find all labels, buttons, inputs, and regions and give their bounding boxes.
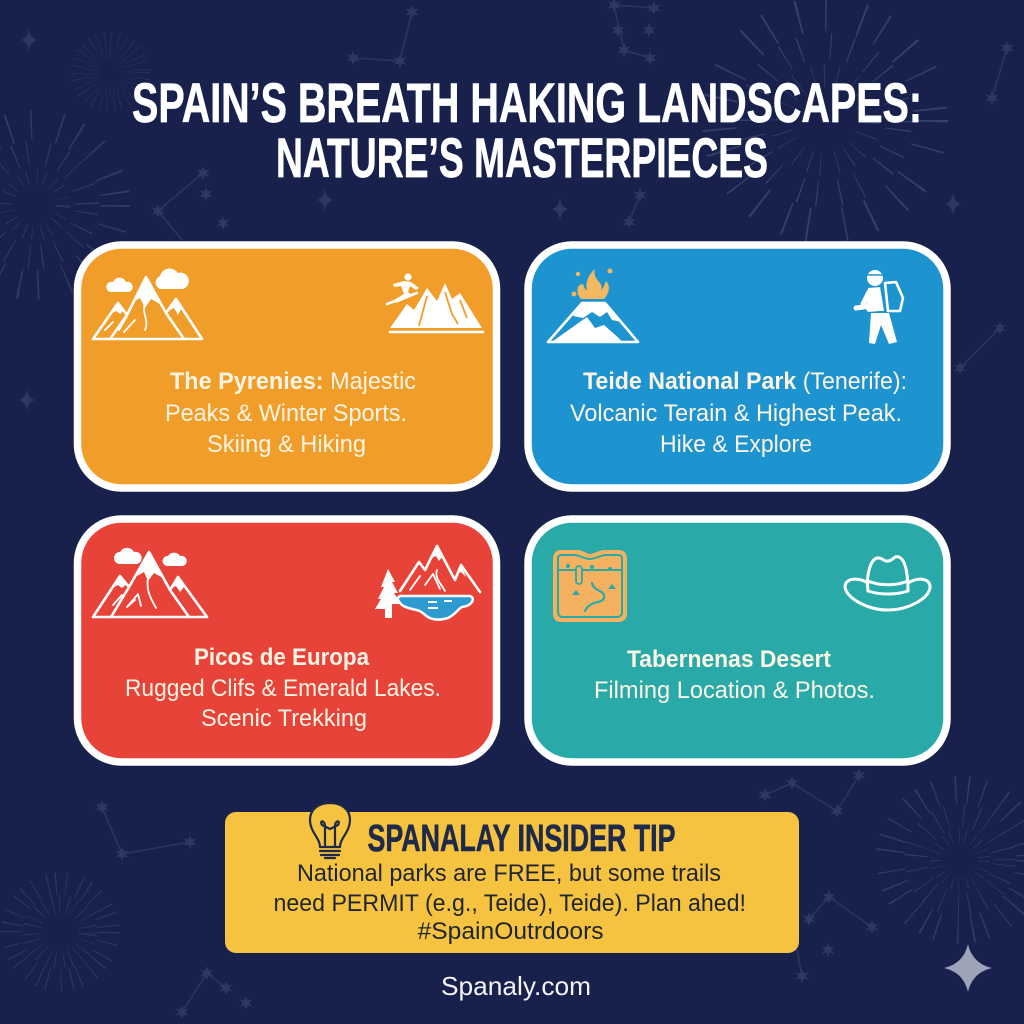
icon: large sparkle [944, 944, 992, 992]
tip text [274, 860, 746, 945]
icon: mountains with clouds [93, 548, 207, 617]
tip text: #SpainOutrdoors [418, 918, 604, 945]
card text: Filming Location & Photos. [594, 677, 875, 704]
icon: volcano [548, 268, 638, 342]
card text [165, 368, 416, 458]
card text [570, 368, 907, 458]
icon: cowboy hat [845, 557, 930, 610]
tip text: National parks are FREE, but some trails [297, 860, 721, 887]
icon: skier over mountains [387, 273, 483, 332]
card text: Tabernenas Desert [627, 646, 831, 673]
card text: Teide National Park (Tenerife): [583, 368, 907, 395]
card text: Picos de Europa [194, 644, 370, 671]
icon: desert map [553, 550, 627, 622]
panel: Tabernas Desert [528, 519, 947, 762]
tip heading: SPANALAY INSIDER TIP [368, 818, 676, 860]
panel: The Pyrenees [78, 245, 496, 488]
website footer: Spanaly.com [441, 971, 591, 1001]
card text [594, 646, 875, 704]
title [132, 71, 922, 189]
panel: Picos de Europa [78, 519, 496, 762]
icon: hiker [856, 270, 903, 344]
icon: mountains with clouds [93, 269, 202, 339]
icon: lightbulb [310, 803, 350, 858]
card text: Scenic Trekking [201, 705, 367, 732]
card text: Rugged Clifs & Emerald Lakes. [125, 675, 441, 702]
card text: Skiing & Hiking [207, 431, 366, 458]
callout: insider tip [225, 803, 799, 953]
card text [125, 644, 441, 732]
tip text: need PERMIT (e.g., Teide), Teide). Plan ahed! [274, 890, 746, 917]
card text: Hike & Explore [660, 431, 812, 458]
panel: Teide National Park [528, 245, 947, 488]
icon: tree, mountains and lake [375, 545, 480, 620]
card text: Volcanic Terain & Highest Peak. [570, 400, 902, 427]
title: NATURE’S MASTERPIECES [276, 126, 768, 189]
card text: The Pyrenies: Majestic [170, 368, 416, 395]
card text: Peaks & Winter Sports. [165, 400, 407, 427]
